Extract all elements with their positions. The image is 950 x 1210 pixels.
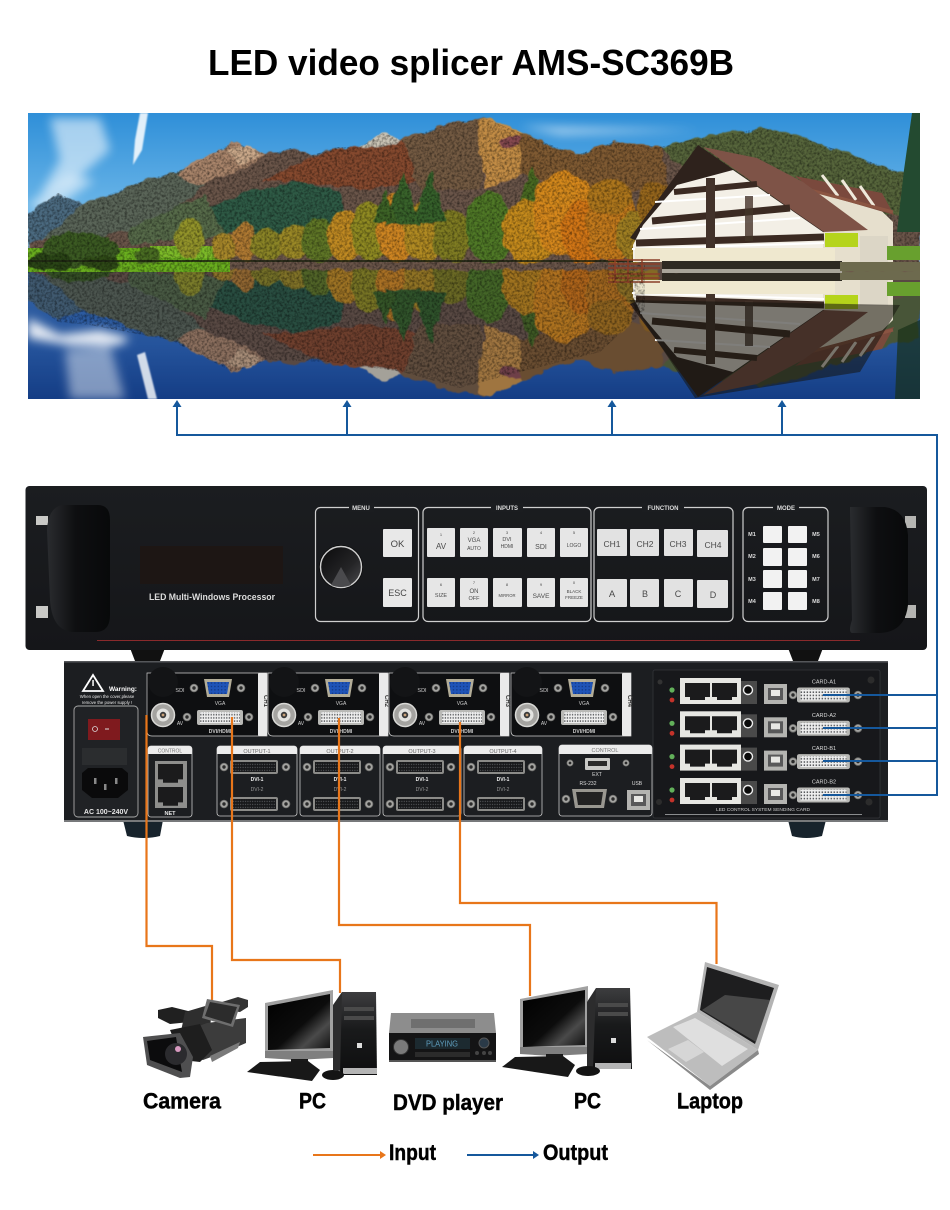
MODE group: M5 <box>812 532 820 538</box>
icon: first PC <box>247 990 377 1081</box>
input channel CH1: AV <box>177 721 184 727</box>
label: Laptop: Laptop <box>677 1088 743 1114</box>
INPUTS group: HDMI <box>501 544 513 550</box>
output box 1: DVI-1 <box>251 777 264 783</box>
card B1 <box>669 745 862 771</box>
MENU group <box>316 503 418 622</box>
INPUTS group: LOGO <box>567 543 581 549</box>
INPUTS group: DVI <box>502 537 512 543</box>
network control box: NET <box>164 811 176 817</box>
input channel CH2: AV <box>298 721 305 727</box>
icon: laptop <box>647 962 779 1090</box>
output box 1: DVI-2 <box>251 787 264 793</box>
serial and USB control box: EXT <box>592 772 602 778</box>
output box 3: OUTPUT-3 <box>408 749 436 755</box>
MODE group: M8 <box>812 599 820 605</box>
label: Camera: Camera <box>143 1088 222 1114</box>
FUNCTION group: D <box>710 590 717 600</box>
output box 1: OUTPUT-1 <box>243 749 271 755</box>
warning label: Warning: <box>109 686 137 693</box>
INPUTS group: 1 <box>440 532 443 537</box>
FUNCTION group: A <box>609 589 616 600</box>
INPUTS group: SIZE <box>435 593 447 599</box>
MODE group: M4 <box>748 599 757 605</box>
INPUTS group: 0 <box>573 580 576 585</box>
input channel CH4: VGA <box>579 701 590 707</box>
MODE group: M7 <box>812 577 820 583</box>
card A1 <box>669 678 862 704</box>
INPUTS group: SAVE <box>533 593 550 600</box>
network control box: CONTROL <box>158 748 182 754</box>
output box 4: DVI-1 <box>497 777 510 783</box>
INPUTS group: FREEZE <box>565 595 583 600</box>
output wires from sending cards <box>823 695 937 795</box>
FUNCTION group: CH4 <box>704 540 722 550</box>
input channel CH4: DVI/HDMI <box>573 729 596 735</box>
INPUTS group: OFF <box>468 596 480 602</box>
input channel CH4: SDI <box>539 688 549 694</box>
label: first PC: PC <box>299 1088 326 1114</box>
INPUTS group: 2 <box>473 530 476 535</box>
warning label <box>80 675 137 705</box>
MENU group: MENU <box>352 506 370 512</box>
input channel CH4 <box>511 667 632 736</box>
FUNCTION group: FUNCTION <box>648 506 678 512</box>
mottled forest texture <box>28 119 920 388</box>
FUNCTION group: CH2 <box>636 539 654 549</box>
network control box <box>148 746 192 817</box>
warning label: When open the cover,please <box>80 694 135 699</box>
INPUTS group: VGA <box>468 538 480 544</box>
input channel CH1: VGA <box>215 701 226 707</box>
input channel CH2: CH2 <box>383 695 389 708</box>
input channel CH3: DVI/HDMI <box>451 729 474 735</box>
legend: output <box>467 1140 609 1165</box>
warning label: remove the power supply ! <box>82 700 132 705</box>
INPUTS group: 5 <box>573 530 576 535</box>
icon: video camera <box>143 997 248 1078</box>
input channel CH2 <box>268 667 389 736</box>
label: second PC: PC <box>574 1088 601 1114</box>
card A1: CARD-A1 <box>812 680 836 686</box>
sending card section <box>653 670 880 818</box>
MODE group: M6 <box>812 554 820 560</box>
MODE group: M1 <box>748 532 756 538</box>
legend: input: Input <box>389 1140 437 1165</box>
MODE group: M2 <box>748 554 756 560</box>
MODE group: MODE <box>777 506 795 512</box>
output box 3: DVI-2 <box>416 787 429 793</box>
output box 2 <box>300 746 380 816</box>
input channel CH3: CH3 <box>504 695 510 708</box>
device name: LED Multi-Windows Processor <box>149 592 275 602</box>
output box 1 <box>217 746 297 816</box>
sending card caption: LED CONTROL SYSTEM SENDING CARD <box>716 807 811 813</box>
icon: DVD player: PLAYING <box>426 1040 458 1048</box>
output box 2: DVI-2 <box>334 787 347 793</box>
INPUTS group: 4 <box>540 530 543 535</box>
output box 2: DVI-1 <box>334 777 347 783</box>
serial and USB control box: RS-232 <box>580 781 597 787</box>
INPUTS group: 9 <box>540 582 543 587</box>
input wiring in orange <box>146 715 716 1000</box>
left rack handle <box>36 505 110 632</box>
output arrowheads <box>172 400 786 407</box>
power inlet and switch: AC 100~240V <box>84 809 128 816</box>
input channel CH3 <box>389 667 510 736</box>
power inlet and switch <box>74 706 138 817</box>
MENU group: OK <box>391 539 405 550</box>
legend: input <box>313 1140 437 1165</box>
INPUTS group: SDI <box>535 544 547 551</box>
INPUTS group: 7 <box>473 580 476 585</box>
rear panel of the device <box>64 661 888 838</box>
INPUTS group: AUTO <box>467 546 481 552</box>
input channel CH3: AV <box>419 721 426 727</box>
card A2 <box>669 711 862 737</box>
card B2 <box>669 778 862 804</box>
title: LED video splicer AMS-SC369B <box>208 42 734 83</box>
output box 4: DVI-2 <box>497 787 510 793</box>
serial and USB control box: USB <box>632 781 643 787</box>
output wiring in blue <box>177 402 937 795</box>
card B1: CARD-B1 <box>812 746 836 752</box>
MODE group <box>743 503 828 622</box>
INPUTS group <box>423 503 591 622</box>
input channel CH1: CH1 <box>262 695 268 708</box>
output box 4 <box>464 746 542 816</box>
INPUTS group: 3 <box>506 530 509 535</box>
INPUTS group: AV <box>436 542 447 551</box>
LCD display <box>140 546 283 584</box>
FUNCTION group: B <box>642 589 648 599</box>
MENU group: ESC <box>388 588 407 598</box>
icon: DVD player <box>389 1013 496 1062</box>
output box 2: OUTPUT-2 <box>326 749 354 755</box>
input channel CH2: SDI <box>296 688 306 694</box>
INPUTS group: BLACK <box>567 589 581 594</box>
INPUTS group: MIRROR <box>499 593 515 598</box>
icon: second PC <box>502 986 632 1077</box>
output box 3 <box>383 746 461 816</box>
INPUTS group: ON <box>470 589 478 595</box>
input channel CH2: DVI/HDMI <box>330 729 353 735</box>
legend: output: Output <box>543 1140 609 1165</box>
output box 3: DVI-1 <box>416 777 429 783</box>
INPUTS group: 8 <box>506 582 509 587</box>
input channel CH3: SDI <box>417 688 427 694</box>
output box 4: OUTPUT-4 <box>489 749 517 755</box>
serial and USB control box <box>559 745 652 816</box>
card A2: CARD-A2 <box>812 713 836 719</box>
panorama photo on LED wall <box>28 113 920 399</box>
INPUTS group: INPUTS <box>496 506 518 512</box>
input channel CH2: VGA <box>336 701 347 707</box>
MODE group: M3 <box>748 577 756 583</box>
FUNCTION group: C <box>675 589 682 599</box>
input channel CH1: DVI/HDMI <box>209 729 232 735</box>
FUNCTION group: CH3 <box>669 539 687 549</box>
input channel CH3: VGA <box>457 701 468 707</box>
serial and USB control box: CONTROL <box>592 748 618 754</box>
INPUTS group: 6 <box>440 582 443 587</box>
label: DVD player: DVD player <box>393 1090 503 1115</box>
card B2: CARD-B2 <box>812 780 836 786</box>
input channel CH4: AV <box>541 721 548 727</box>
front panel of the device <box>26 486 927 661</box>
input channel CH1: SDI <box>175 688 185 694</box>
FUNCTION group <box>594 503 733 622</box>
FUNCTION group: CH1 <box>603 539 621 549</box>
right rack handle <box>850 507 916 633</box>
input channel CH4: CH4 <box>626 695 632 708</box>
input channel CH1 <box>147 667 268 736</box>
